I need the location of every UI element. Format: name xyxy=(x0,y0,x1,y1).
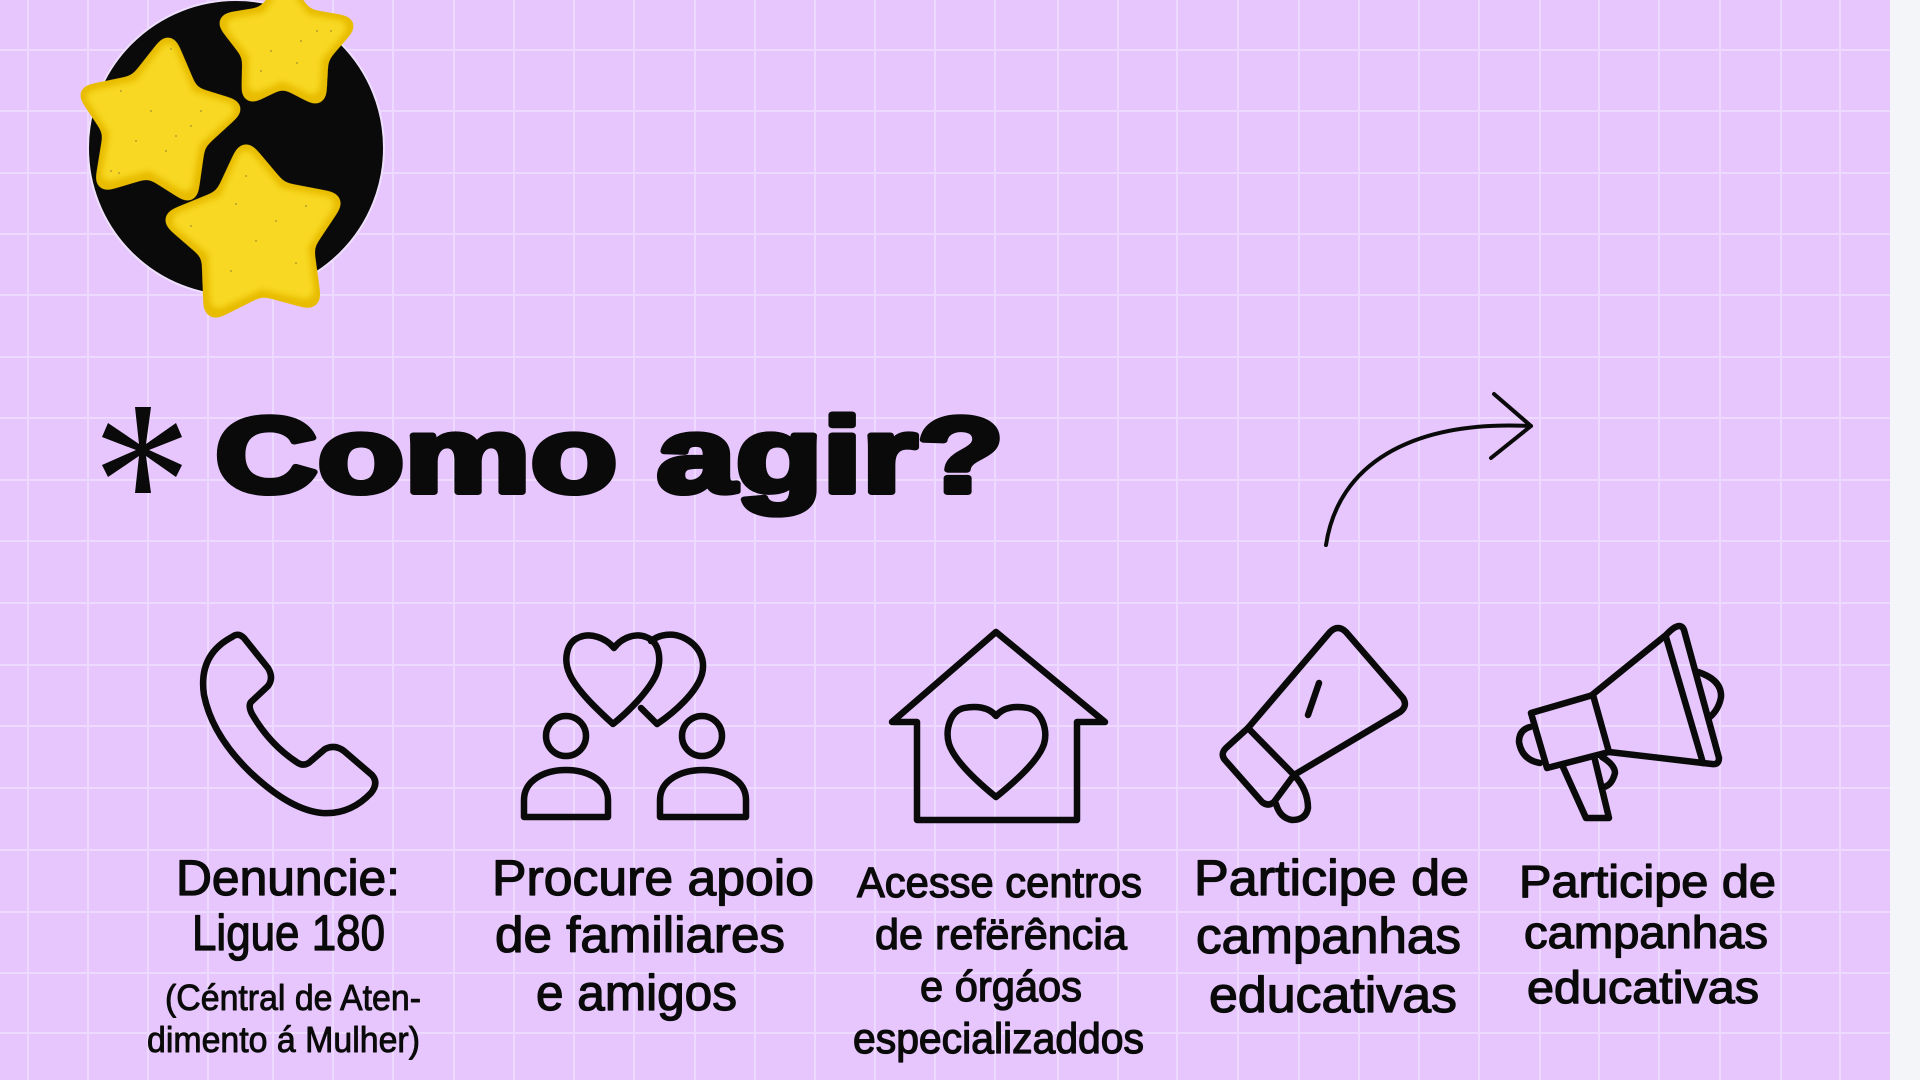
icon: left star xyxy=(90,47,231,191)
text: Participe de campanhas: campanhas xyxy=(1524,907,1768,958)
icon: asterisk xyxy=(102,407,182,493)
text: Acesse centros: de refërência xyxy=(875,911,1127,959)
text: Participe de campanhas xyxy=(1519,856,1776,1013)
icon: top star xyxy=(229,0,344,94)
text: Procure apoio: e amigos xyxy=(536,965,737,1021)
text: Acesse centros: especializaddos xyxy=(853,1015,1144,1063)
text: Participe de campanhas xyxy=(1194,850,1469,1023)
icon: bottom star xyxy=(176,155,330,307)
icon: telephone xyxy=(203,635,375,813)
text: Procure apoio: Procure apoio xyxy=(492,850,814,906)
column: Procure apoio xyxy=(492,635,814,1021)
icon: house with heart xyxy=(892,632,1105,820)
column: Participe de campanhas, first xyxy=(1194,628,1469,1023)
text: Denuncie heading: Ligue 180 xyxy=(192,905,385,961)
text: Participe de campanhas: educativas xyxy=(1209,967,1457,1023)
column: Denuncie xyxy=(147,635,421,1060)
arrow xyxy=(1326,394,1531,545)
icon: two people with hearts xyxy=(524,635,746,817)
text: Procure apoio: de familiares xyxy=(495,907,785,963)
icon: angled megaphone xyxy=(1223,628,1405,820)
text: Denuncie heading xyxy=(176,850,400,961)
text: Participe de campanhas: campanhas xyxy=(1196,908,1461,964)
text: Central de Atendimento xyxy=(147,977,421,1060)
text: Acesse centros: e órgáos xyxy=(920,963,1082,1011)
text: Central de Atendimento: (Céntral de Aten- xyxy=(165,977,421,1018)
icon: side megaphone xyxy=(1519,626,1721,818)
text: Acesse centros: Acesse centros xyxy=(857,859,1142,907)
column: Acesse centros xyxy=(853,632,1144,1063)
text: Acesse centros xyxy=(853,859,1144,1063)
text: Participe de campanhas: Participe de xyxy=(1194,850,1469,906)
text: Participe de campanhas: Participe de xyxy=(1519,856,1776,907)
title: Como agir? xyxy=(215,395,1004,515)
text: Denuncie heading: Denuncie: xyxy=(176,850,400,906)
icon: black circle with three yellow stars xyxy=(88,0,384,307)
column: Participe de campanhas, second xyxy=(1519,626,1776,1013)
text: Central de Atendimento: dimento á Mulher) xyxy=(147,1019,420,1060)
text: Procure apoio xyxy=(492,850,814,1021)
text: Participe de campanhas: educativas xyxy=(1527,962,1759,1013)
